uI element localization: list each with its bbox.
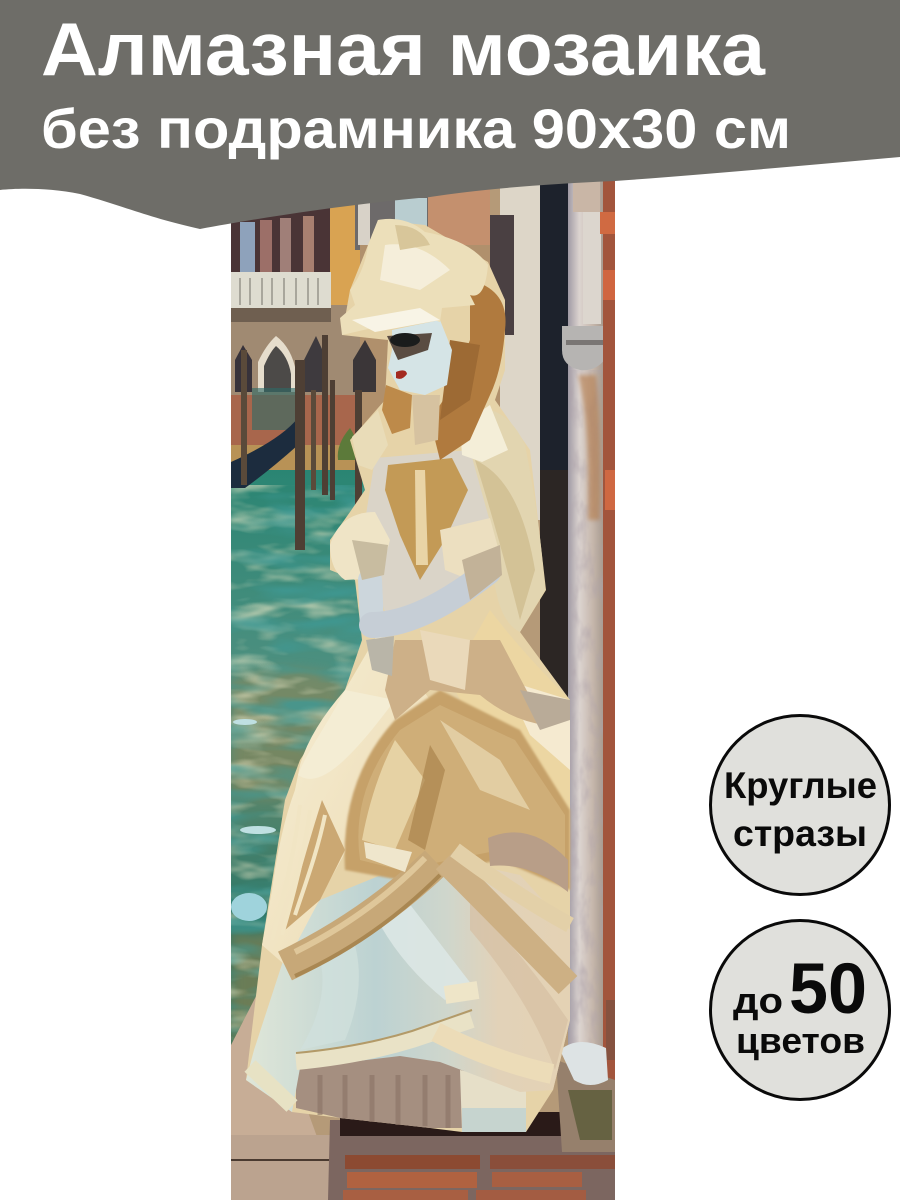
lower skirt hem with lace — [296, 1052, 470, 1128]
grey header banner — [0, 0, 900, 229]
gold lace panel — [345, 690, 570, 890]
pavement and brick floor — [231, 996, 615, 1200]
badge: round rhinestones: Круглые — [724, 765, 877, 806]
subtitle: без подрамника 90х30 см — [41, 97, 791, 160]
bodice — [362, 450, 495, 612]
body silhouette — [246, 220, 570, 1132]
veil on shoulder — [512, 425, 543, 632]
gloved arms and hands — [370, 572, 488, 625]
puffed sleeves — [330, 512, 390, 580]
woman in carnival costume — [246, 219, 570, 1132]
upper cream overskirt — [262, 630, 430, 965]
hair — [430, 280, 506, 460]
skirt hem ruffles — [250, 990, 552, 1106]
product photo: masked woman in Venice — [231, 180, 615, 1200]
badge: round rhinestones — [710, 716, 890, 894]
right satin overskirt — [570, 700, 571, 701]
badge: up to 50 colours: 50 — [789, 950, 867, 1029]
title: Алмазная мозаика — [41, 7, 766, 91]
canal water — [231, 470, 365, 1045]
Venetian palace facade — [231, 180, 510, 550]
badge: up to 50 colours: до — [733, 980, 783, 1021]
left ruffled folds — [285, 800, 345, 930]
mask — [388, 320, 452, 395]
picture base tone — [308, 188, 568, 1135]
doorway and stone pillar with bricks — [490, 181, 615, 1080]
sash — [285, 850, 570, 985]
badge: round rhinestones: стразы — [733, 813, 867, 854]
badge: up to 50 colours: цветов — [736, 1020, 865, 1061]
pale satin skirt — [246, 855, 570, 1112]
badge: up to 50 colours — [710, 920, 890, 1100]
feathered hat — [340, 219, 488, 335]
ruffled centre drape — [385, 640, 545, 725]
